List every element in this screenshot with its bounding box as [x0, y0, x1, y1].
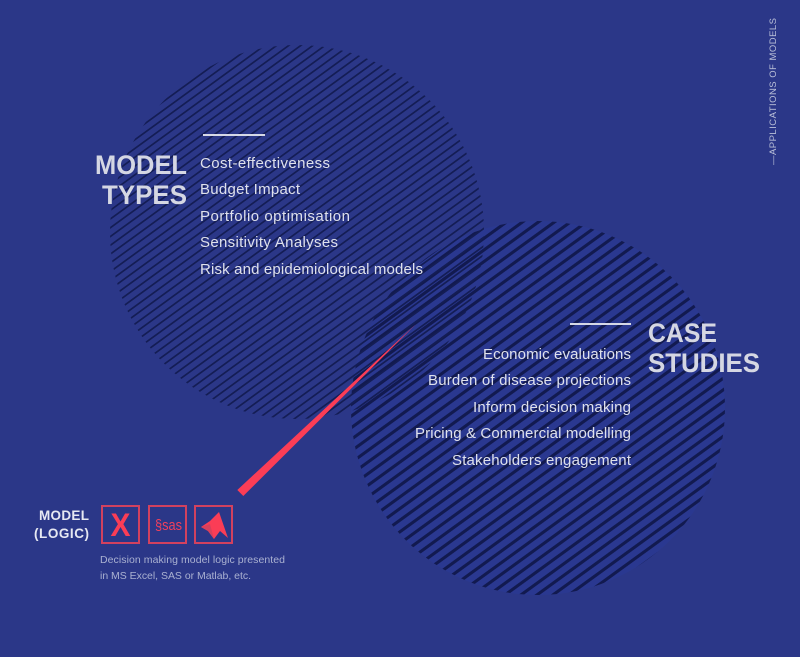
- heading: model logic: [34, 508, 89, 541]
- heading: case studies: STUDIES: [648, 348, 760, 378]
- list: model types: Budget Impact: [200, 181, 301, 198]
- list: model types: Cost-effectiveness: [200, 155, 330, 172]
- divider: model types: [203, 134, 265, 136]
- list: case studies: Economic evaluations: [483, 346, 631, 363]
- heading: case studies: CASE: [648, 318, 717, 348]
- list: case studies: Burden of disease projections: [428, 372, 631, 389]
- description: model logic: [100, 554, 285, 582]
- panel: model types: [95, 134, 423, 278]
- panel: case studies: [415, 318, 760, 469]
- heading: model logic: (LOGIC): [34, 526, 89, 541]
- list: case studies: [415, 346, 632, 469]
- icon: sas: [149, 506, 186, 543]
- icon: matlab: [195, 506, 232, 543]
- icon: sas: §sas: [155, 517, 182, 534]
- list: model types: Sensitivity Analyses: [200, 234, 338, 251]
- heading: model types: TYPES: [102, 180, 187, 210]
- panel: model logic: [34, 506, 285, 582]
- circle: model types: [110, 45, 484, 419]
- icon: excel: [102, 506, 139, 543]
- list: case studies: Stakeholders engagement: [452, 452, 632, 469]
- list: model types: [200, 155, 423, 278]
- divider: case studies: [570, 323, 631, 325]
- vertical label: applications of models: —APPLICATIONS OF MODELS: [768, 18, 779, 165]
- list: case studies: Inform decision making: [473, 399, 631, 416]
- description: model logic: in MS Excel, SAS or Matlab, etc.: [100, 570, 251, 582]
- list: model types: Risk and epidemiological models: [200, 261, 423, 278]
- list: case studies: Pricing & Commercial modelling: [415, 425, 631, 442]
- heading: model logic: MODEL: [39, 508, 89, 523]
- heading: model types: MODEL: [95, 150, 187, 180]
- list: model types: Portfolio optimisation: [200, 208, 350, 225]
- description: model logic: Decision making model logic presented: [100, 554, 285, 566]
- circle: case studies: [351, 221, 725, 595]
- icon: excel: X: [110, 507, 131, 543]
- heading: model types: [95, 150, 187, 210]
- heading: case studies: [648, 318, 760, 378]
- arrow: red wedge from model logic to overlap: [237, 324, 416, 496]
